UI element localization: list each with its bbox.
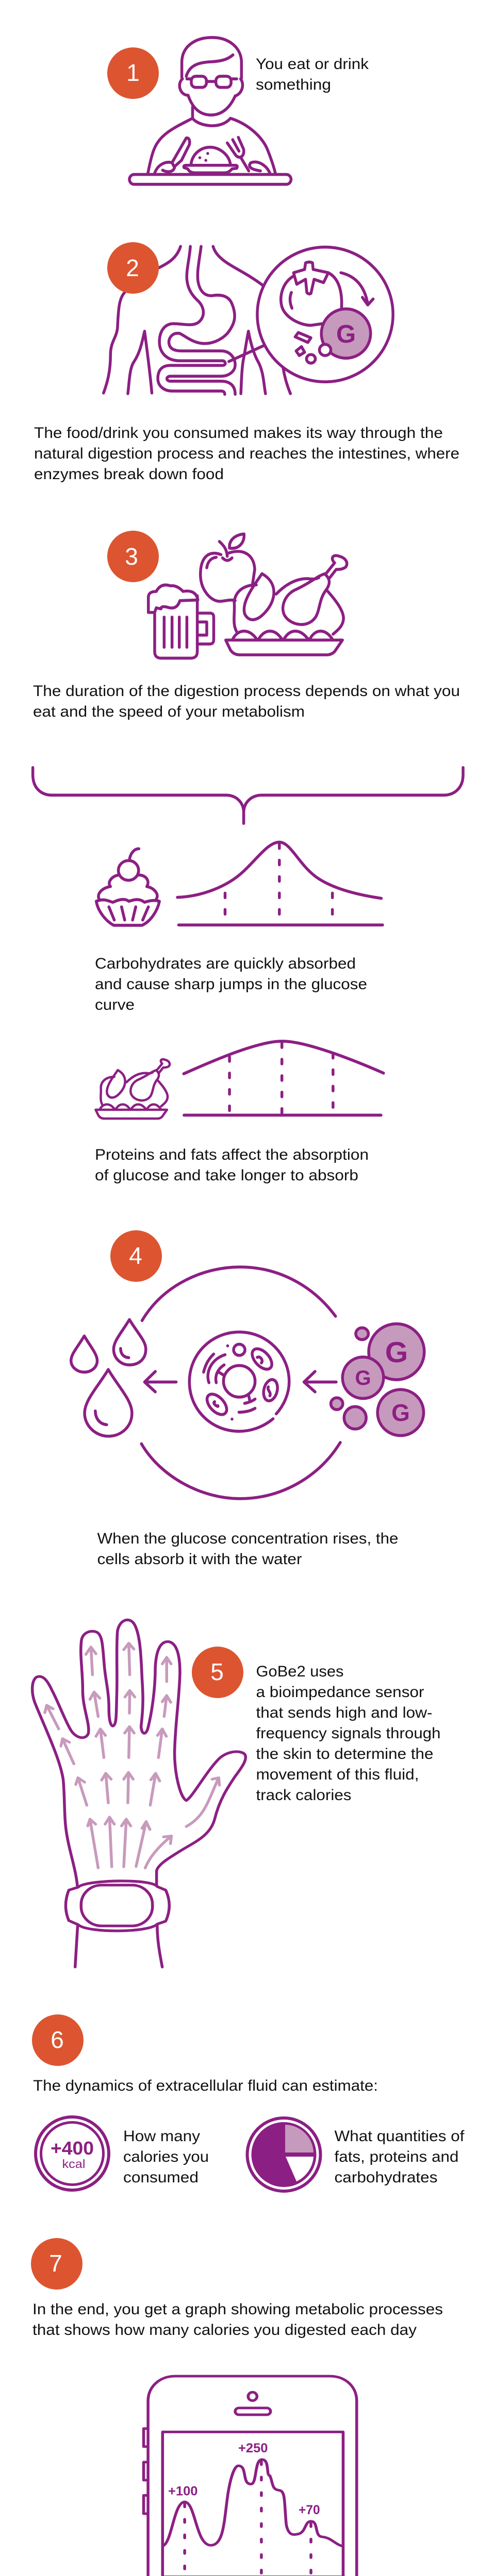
step 3 badge: 3 <box>125 543 138 570</box>
text: how many calories: How many <box>123 2128 200 2145</box>
text: carbohydrates: and cause sharp jumps in the glucose <box>95 976 367 993</box>
diagram: cell absorbing glucose and water: G <box>391 1399 410 1426</box>
graph line <box>162 2460 342 2546</box>
step 2 badge <box>107 242 159 294</box>
icon: digestive system with zoomed glucose circle: G <box>336 320 356 348</box>
chart: sharp glucose curve <box>177 842 383 925</box>
text: proteins and fats: of glucose and take longer to absorb <box>95 1167 358 1184</box>
text: step 5: track calories <box>256 1787 352 1804</box>
text: step 7 <box>32 2301 443 2338</box>
text: what quantities: fats, proteins and <box>334 2148 459 2165</box>
text: step 2: The food/drink you consumed makes its way through the <box>34 425 443 442</box>
step 6 badge: 6 <box>51 2026 64 2053</box>
chart: macronutrient pie <box>248 2118 321 2191</box>
text: how many calories <box>123 2128 209 2186</box>
diagram: cell absorbing glucose and water <box>71 1267 424 1499</box>
icon: water drops <box>71 1319 146 1436</box>
step 5 badge <box>192 1647 243 1698</box>
diagram: cell absorbing glucose and water: G <box>355 1367 371 1389</box>
text: step 2: enzymes break down food <box>34 466 224 483</box>
text: step 4: cells absorb it with the water <box>97 1551 302 1568</box>
text: step 2 <box>34 425 459 483</box>
icon: person eating <box>129 38 291 184</box>
text: what quantities: carbohydrates <box>334 2169 437 2186</box>
icon: calories ring <box>36 2117 109 2190</box>
text: step 3: eat and the speed of your metabolism <box>33 703 305 720</box>
text: step 5 <box>256 1663 440 1804</box>
icon: glucose molecules <box>331 1324 424 1435</box>
icon: cell <box>189 1332 289 1431</box>
text: step 2: natural digestion process and reaches the intestines, where <box>34 445 459 462</box>
text: step 1: You eat or drink <box>256 56 369 73</box>
text: step 5: that sends high and low- <box>256 1704 432 1721</box>
text: step 5: GoBe2 uses <box>256 1663 343 1680</box>
text: carbohydrates: curve <box>95 996 135 1013</box>
arrow: toward drops <box>144 1371 176 1392</box>
text: step 4: When the glucose concentration rises, the <box>97 1530 398 1547</box>
icon: cupcake <box>96 849 159 925</box>
arc: bottom <box>141 1443 340 1499</box>
text: step 5: movement of this fluid, <box>256 1766 419 1783</box>
step 4 badge <box>110 1230 162 1282</box>
text: step 5: a bioimpedance sensor <box>256 1684 424 1701</box>
text: what quantities <box>334 2128 465 2186</box>
step 4 badge: 4 <box>129 1242 142 1269</box>
step 7 badge <box>31 2238 82 2290</box>
icon: phone with calorie graph: +70 <box>299 2503 320 2517</box>
text: step 7: In the end, you get a graph showing metabolic processes <box>32 2301 443 2318</box>
text: step 4 <box>97 1530 398 1568</box>
icon: phone with calorie graph <box>32 2376 467 2576</box>
arc: top <box>142 1267 336 1320</box>
step 7 badge: 7 <box>49 2250 62 2277</box>
wristband <box>65 1881 169 1931</box>
text: step 6 intro: The dynamics of extracellular fluid can estimate: <box>33 2077 378 2094</box>
icon: hand with wristband and fluid arrows <box>32 1620 245 1967</box>
forearm <box>75 1926 162 1967</box>
text: carbohydrates: Carbohydrates are quickly absorbed <box>95 955 356 972</box>
step 6 badge <box>32 2014 84 2066</box>
text: carbohydrates <box>95 955 367 1013</box>
text: step 3: The duration of the digestion process depends on what you <box>33 683 460 700</box>
text: what quantities: What quantities of <box>334 2128 465 2145</box>
diagram: cell absorbing glucose and water: G <box>385 1336 408 1369</box>
icon: phone with calorie graph: +250 <box>238 2441 268 2455</box>
icon: calories ring: kcal <box>62 2157 86 2171</box>
step 1 badge: 1 <box>126 59 140 86</box>
text: proteins and fats: Proteins and fats affect the absorption <box>95 1146 369 1163</box>
text: step 5: the skin to determine the <box>256 1745 433 1762</box>
text: step 5: frequency signals through <box>256 1725 440 1742</box>
icon: digestive system with zoomed glucose circle <box>104 246 393 394</box>
step 5 badge: 5 <box>210 1658 224 1685</box>
icon: calories ring: +400 <box>51 2138 94 2159</box>
text: step 1 <box>256 56 369 93</box>
step 3 badge <box>107 531 159 582</box>
text: how many calories: calories you <box>123 2148 209 2165</box>
icon: small roast chicken <box>95 1059 170 1118</box>
arrow: toward cell <box>304 1371 336 1392</box>
step 1 badge <box>107 47 159 99</box>
fluid arrows <box>45 1643 219 1868</box>
text: how many calories: consumed <box>123 2169 199 2186</box>
brace <box>33 768 463 823</box>
icon: beer, apple and roast chicken <box>148 534 347 658</box>
step 2 badge: 2 <box>126 255 139 281</box>
text: step 1: something <box>256 76 331 93</box>
text: proteins and fats <box>95 1146 369 1184</box>
text: step 7: that shows how many calories you digested each day <box>32 2321 417 2338</box>
hand outline <box>32 1620 245 1886</box>
text: step 3 <box>33 683 460 720</box>
icon: phone with calorie graph: +100 <box>168 2484 198 2499</box>
chart: gentle glucose curve <box>184 1041 384 1115</box>
